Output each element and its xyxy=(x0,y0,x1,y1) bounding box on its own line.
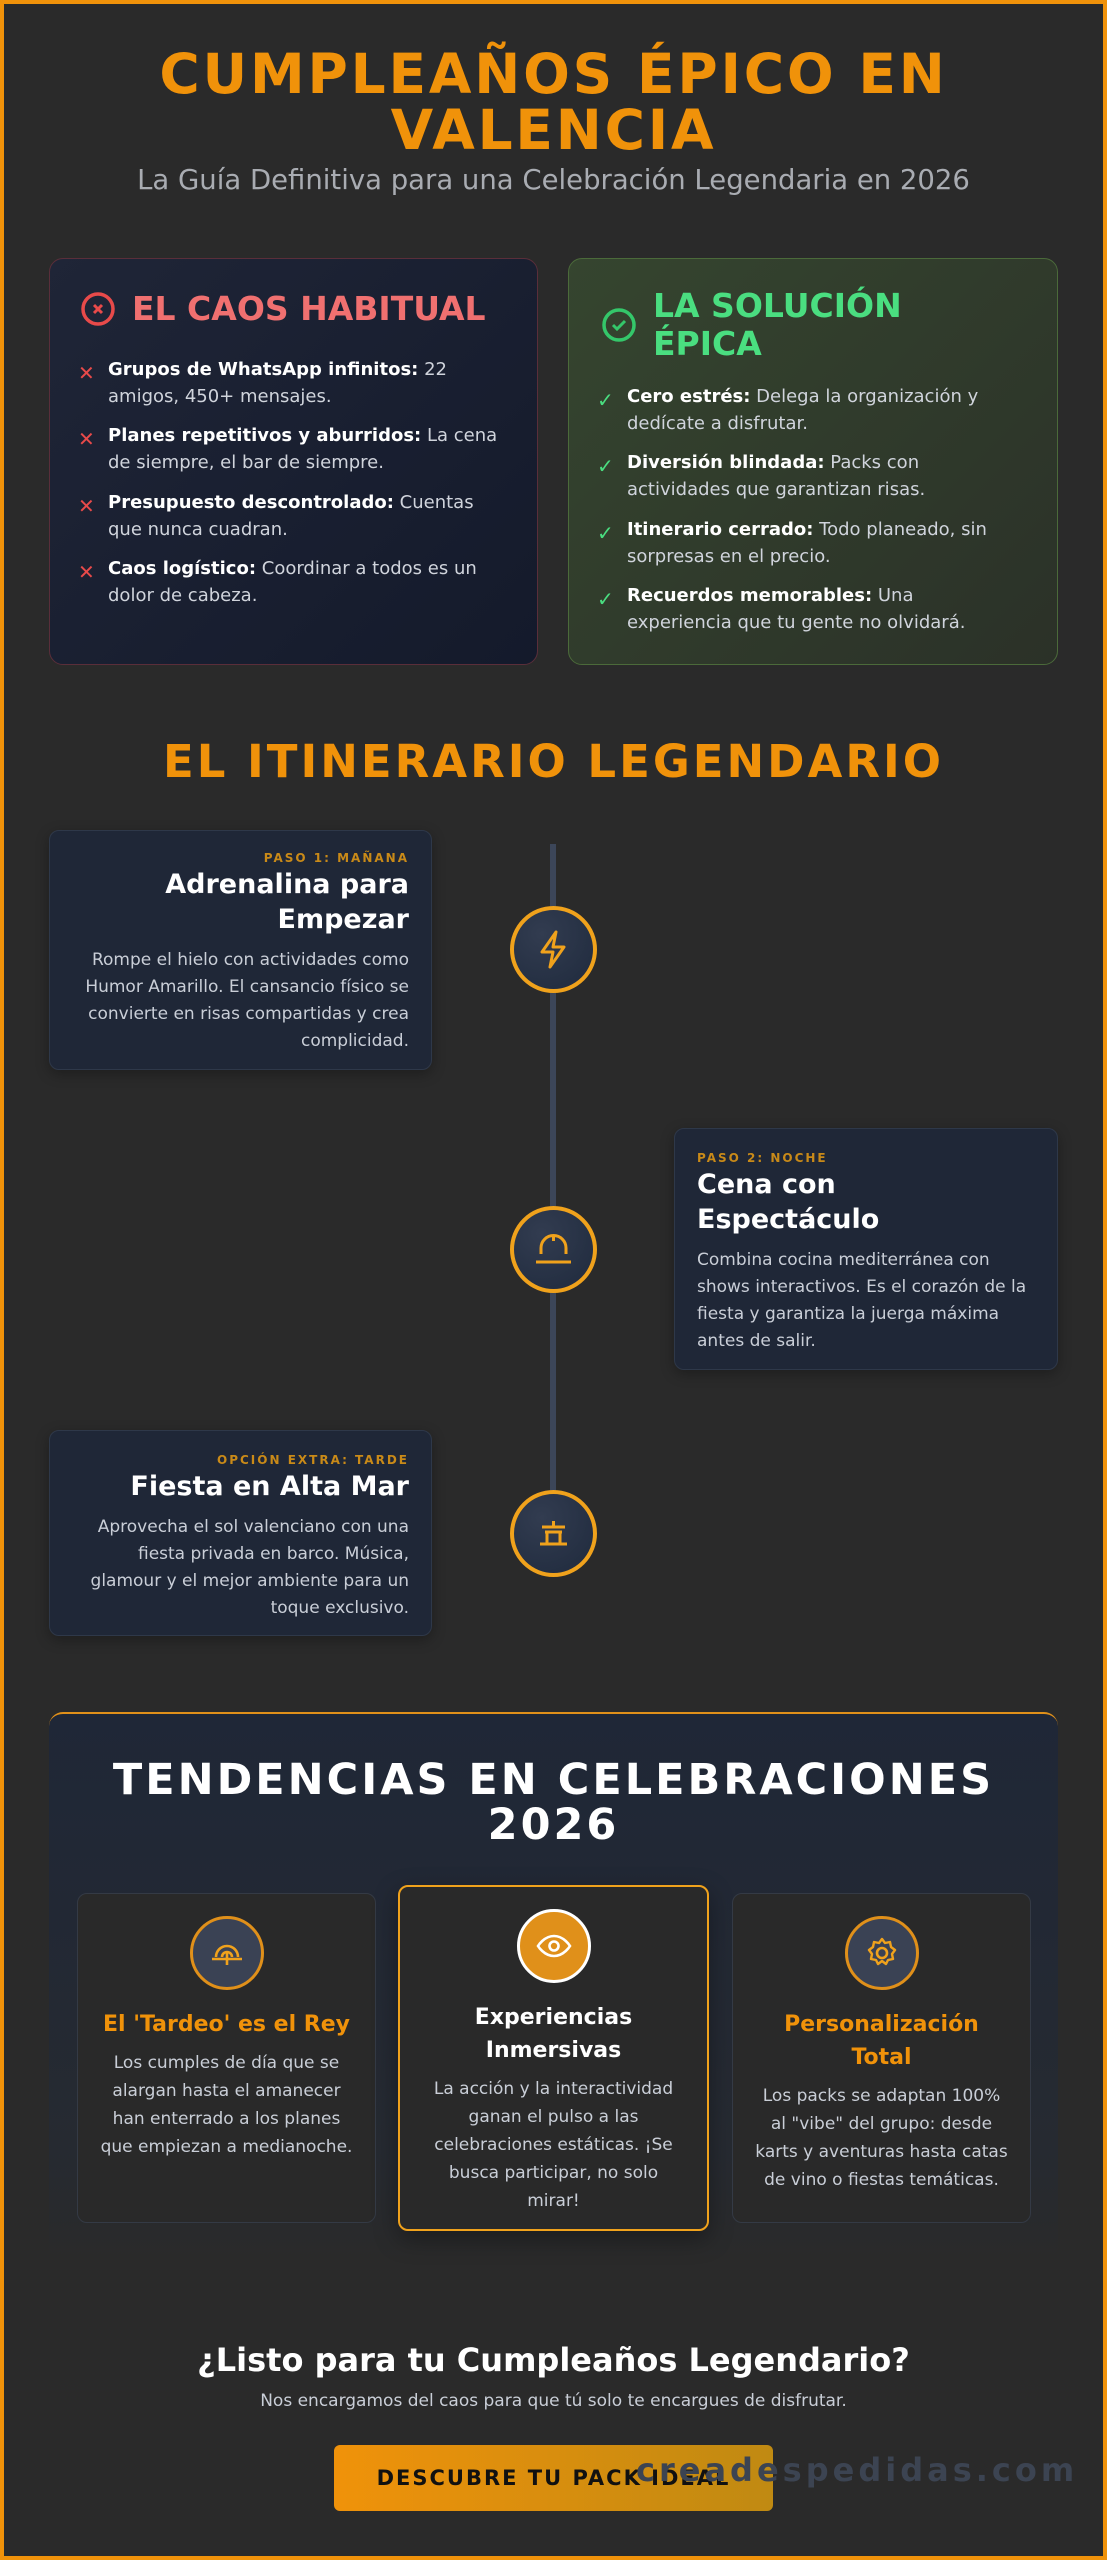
trend card: personalizacion xyxy=(732,1893,1031,2223)
panel: tendencias xyxy=(49,1712,1058,2262)
trend card: personalizacion: Los packs se adaptan 100% al "vibe" del grupo: desde karts y aventuras hasta catas de vino o fiestas temáticas. xyxy=(755,2086,1008,2190)
list: solucion items xyxy=(597,386,987,633)
trend card: inmersivas: Experiencias xyxy=(475,2005,632,2030)
list: caos items: ✕ xyxy=(78,560,95,584)
title: CUMPLEAÑOS ÉPICO EN xyxy=(159,42,948,106)
trend card: tardeo: Los cumples de día que se alargan hasta el amanecer han enterrado a los planes que empiezan a medianoche. xyxy=(101,2053,352,2157)
list: caos items: ✕ xyxy=(78,361,95,385)
cta button: DESCUBRE TU PACK IDEAL xyxy=(377,2466,730,2490)
card: paso 1: PASO 1: MAÑANA xyxy=(264,851,409,865)
list: caos items: Planes repetitivos y aburridos: La cena de siempre, el bar de siempre. xyxy=(108,425,497,473)
heading: tendencias: 2026 xyxy=(488,1800,619,1850)
icon: sunset xyxy=(190,1916,264,1990)
card: paso 1: Empezar xyxy=(278,904,409,935)
list: solucion items: ✓ xyxy=(597,521,614,545)
icon: eye xyxy=(516,1909,590,1983)
list: solucion items: ✓ xyxy=(597,587,614,611)
list: caos items: Grupos de WhatsApp infinitos: 22 amigos, 450+ mensajes. xyxy=(108,359,447,407)
card: paso 2: Espectáculo xyxy=(697,1204,879,1235)
heading: caos: EL CAOS HABITUAL xyxy=(132,289,486,328)
card: opcion extra: Fiesta en Alta Mar xyxy=(130,1471,409,1502)
trend card: personalizacion: Personalización xyxy=(784,2012,979,2037)
card: paso 2: PASO 2: NOCHE xyxy=(697,1151,828,1165)
icon: cloche xyxy=(510,1206,597,1293)
panel: el caos habitual xyxy=(49,258,538,665)
list: solucion items: ✓ xyxy=(597,454,614,478)
trend card: inmersivas: La acción y la interactividad ganan el pulso a las celebraciones estáticas. ¡Se busca participar, no solo mirar! xyxy=(434,2079,673,2211)
card: paso 1: Rompe el hielo con actividades como Humor Amarillo. El cansancio físico se convierte en risas compartidas y crea complicidad. xyxy=(85,950,409,1051)
card: paso 2 xyxy=(674,1128,1058,1370)
list: solucion items: Itinerario cerrado: Todo planeado, sin sorpresas en el precio. xyxy=(627,519,987,567)
list: caos items: ✕ xyxy=(78,494,95,518)
list: solucion items: Cero estrés: Delega la organización y dedícate a disfrutar. xyxy=(627,386,978,434)
trend card: personalizacion: Total xyxy=(851,2045,912,2070)
list: caos items: ✕ xyxy=(78,427,95,451)
list: caos items: Presupuesto descontrolado: Cuentas que nunca cuadran. xyxy=(108,492,474,540)
title xyxy=(159,42,948,162)
cta heading: ¿Listo para tu Cumpleaños Legendario? xyxy=(197,2341,910,2379)
timeline line xyxy=(550,844,556,1534)
card: paso 1: Adrenalina para xyxy=(165,869,409,900)
heading: tendencias xyxy=(113,1755,994,1850)
heading: itinerario: EL ITINERARIO LEGENDARIO xyxy=(163,735,944,788)
heading: tendencias: TENDENCIAS EN CELEBRACIONES xyxy=(113,1755,994,1805)
icon: lightning xyxy=(510,906,597,993)
watermark: creadespedidas.com xyxy=(636,2451,1078,2489)
subtitle: La Guía Definitiva para una Celebración Legendaria en 2026 xyxy=(137,164,970,196)
panel: la solucion epica xyxy=(568,258,1058,665)
title: VALENCIA xyxy=(391,98,716,162)
card: opcion extra: OPCIÓN EXTRA: TARDE xyxy=(217,1453,409,1467)
list: caos items xyxy=(78,359,497,606)
cta subtitle: Nos encargamos del caos para que tú solo te encargues de disfrutar. xyxy=(260,2391,847,2411)
card: paso 2: Cena con xyxy=(697,1169,836,1200)
card: opcion extra: Aprovecha el sol valenciano con una fiesta privada en barco. Música, glamour y el mejor ambiente para un toque exclusivo. xyxy=(91,1517,409,1618)
cta button xyxy=(334,2445,773,2511)
trend card: inmersivas: Inmersivas xyxy=(486,2038,621,2063)
icon: boat xyxy=(510,1490,597,1577)
heading: solucion xyxy=(602,286,902,363)
heading: solucion: LA SOLUCIÓN xyxy=(653,286,902,325)
card: opcion extra xyxy=(49,1430,432,1636)
list: caos items: Caos logístico: Coordinar a todos es un dolor de cabeza. xyxy=(108,558,477,606)
list: solucion items: ✓ xyxy=(597,388,614,412)
list: solucion items: Recuerdos memorables: Una experiencia que tu gente no olvidará. xyxy=(627,585,965,633)
card: paso 1 xyxy=(49,830,432,1070)
trend card: tardeo xyxy=(77,1893,376,2223)
card: paso 2: Combina cocina mediterránea con shows interactivos. Es el corazón de la fiesta y garantiza la juerga máxima antes de salir. xyxy=(697,1250,1026,1351)
trend card: tardeo: El 'Tardeo' es el Rey xyxy=(103,2012,350,2037)
list: solucion items: Diversión blindada: Packs con actividades que garantizan risas. xyxy=(627,452,925,500)
trend card: inmersivas xyxy=(398,1885,709,2231)
icon: gear xyxy=(844,1916,918,1990)
heading: solucion: ÉPICA xyxy=(653,324,762,363)
